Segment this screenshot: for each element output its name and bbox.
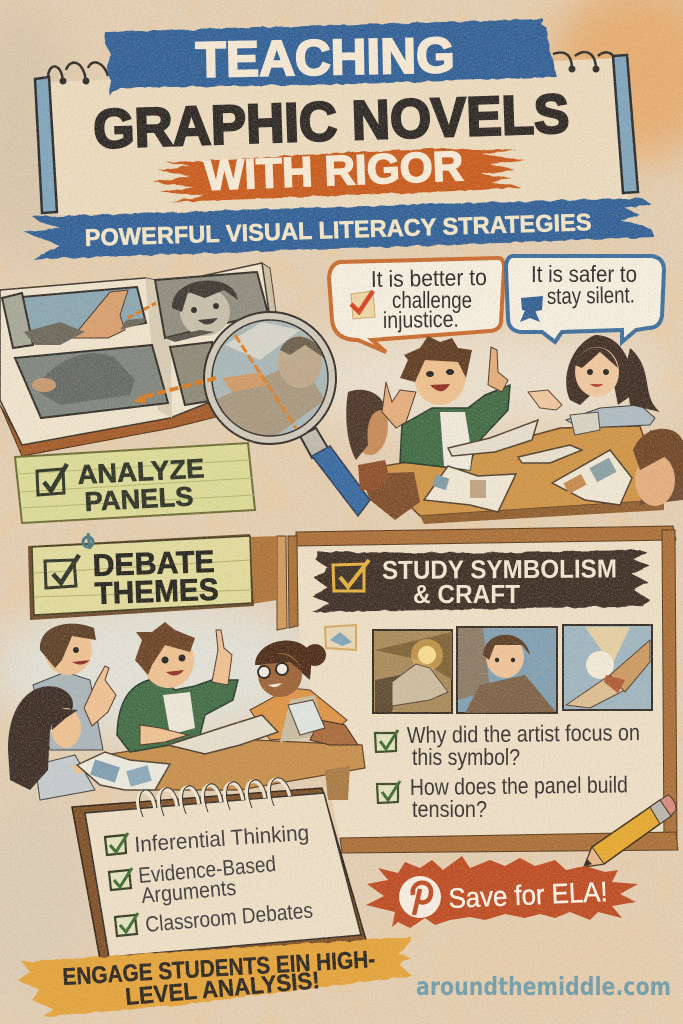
small wall picture [325,625,356,650]
debate scene: students at table [8,622,365,800]
dark banner [312,550,650,612]
checkbox [333,560,369,591]
title banner: Teaching [104,19,557,95]
orange guide lines [235,335,296,428]
magnifying glass [133,312,370,516]
student: long-hair girl [8,686,95,800]
checklist item: evidence-based arguments: Arguments [140,875,237,908]
panels [2,272,268,418]
analyze panels note: PANELS [84,481,194,517]
student: girl with glasses [250,641,358,745]
spiral binding [138,779,290,815]
title banner: With Rigor [152,142,525,202]
panel tracking arrow [128,303,156,318]
student: green hoodie boy [382,336,510,470]
chair [360,472,420,520]
engage students banner [18,937,412,1017]
checklist item: classroom debates: Classroom Debates [144,897,314,937]
right blue bar [613,55,638,193]
title word: TEACHING [195,27,455,88]
study symbolism frame [277,526,678,853]
icon: blue ribbon [520,296,543,322]
icon: push pin [83,533,93,549]
handle [300,428,328,458]
notebook frame behind title [35,52,638,215]
checkbox [37,464,67,495]
icon: pencil [584,795,676,867]
student: left kid [346,390,390,490]
spiral rings [48,52,614,82]
table [372,426,664,516]
table [105,738,365,790]
comic panel: light and sword [563,625,652,710]
speech bubble: better to challenge [329,258,504,352]
open books on table [424,420,632,512]
icon: red check [351,291,375,319]
check item: tension question: tension? [412,796,487,822]
cover [0,380,284,456]
checklist item: evidence-based arguments: Evidence-Based [137,851,277,888]
subtitle banner [24,198,655,259]
student: green hoodie boy [117,622,238,752]
debate themes wood backing and note [28,533,277,620]
label text: DEBATE [92,544,215,583]
comic panel: glowing symbol [373,630,452,713]
manga face in panel [180,288,230,336]
icon: pinterest [399,876,441,918]
classroom scene: students debating at table [346,335,683,524]
comic panel: boy portrait [457,627,557,713]
speech bubble: safer to stay silent: stay silent. [547,281,635,309]
check item: symbol question: this symbol? [412,744,520,770]
dark banner: & CRAFT [413,579,520,609]
student: boy pointing [33,624,116,750]
title word: WITH RIGOR [204,142,464,199]
check item: symbol question [375,719,640,770]
save for ELA burst [366,856,638,928]
check item: tension question: How does the panel build [410,771,628,800]
checklist item: evidence-based arguments [109,851,277,908]
check item: symbol question: Why did the artist focus on [407,719,640,748]
hand in panel [72,290,128,338]
banner text: ENGAGE STUDENTS EIN HIGH- [62,946,376,991]
speech bubble: safer to stay silent [506,256,664,342]
open comic book [0,263,284,456]
spiral notebook checklist [72,778,366,970]
banner text: STUDY SYMBOLISM [382,553,617,585]
lens rim [208,316,332,440]
lens scene [210,318,330,438]
left blue bar [35,77,57,213]
button text: Save for ELA! [448,876,608,914]
bubble text: It is better to [371,264,487,292]
car in panel [36,353,135,405]
bubble text: It is safer to [531,261,637,287]
student: long-hair girl [528,335,660,435]
student: right kid [633,429,683,506]
title: Graphic Novels: GRAPHIC NOVELS [92,82,570,160]
speech bubble: better to challenge: injustice. [383,306,459,333]
open books [77,715,278,790]
wooden frame [277,526,678,853]
check item: tension question [377,771,628,822]
debate themes wood backing and note: THEMES [94,572,219,611]
engage students banner: LEVEL ANALYSIS! [124,967,321,1011]
subtitle text: POWERFUL VISUAL LITERACY STRATEGIES [84,209,592,252]
speech bubble: better to challenge: challenge [392,287,472,313]
label text: ANALYZE [77,453,205,490]
analyze panels note [15,443,255,523]
checkbox [45,555,79,588]
checklist item: inferential thinking: Inferential Thinking [134,820,310,857]
